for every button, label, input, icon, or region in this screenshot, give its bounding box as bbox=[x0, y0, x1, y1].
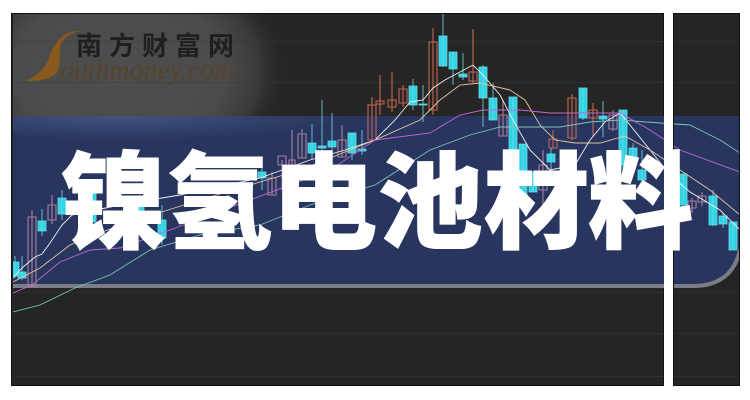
line: MA5 white bbox=[13, 65, 740, 278]
blue title band bbox=[13, 116, 740, 286]
logo url: outhmoney.com bbox=[60, 55, 234, 86]
title: 料 bbox=[588, 146, 693, 263]
title: 氢 bbox=[167, 146, 272, 263]
logo: southmoney bbox=[25, 31, 241, 86]
candles: hollow rising, pink bbox=[28, 100, 706, 287]
line: MA20 purple bbox=[13, 110, 740, 293]
title: 镍 bbox=[61, 146, 166, 263]
title bbox=[61, 146, 693, 263]
candlestick chart bbox=[11, 14, 737, 287]
moving average lines bbox=[13, 65, 740, 312]
candles: solid falling, cyan bbox=[11, 14, 737, 280]
logo glow bbox=[13, 14, 313, 117]
title: 材 bbox=[484, 146, 589, 263]
candles: hollow rising, red bbox=[368, 28, 597, 148]
title: 电 bbox=[272, 146, 377, 263]
line: MA10 cream bbox=[13, 83, 740, 282]
line: MA60 teal bbox=[13, 120, 740, 312]
logo chinese name: 南方财富网 bbox=[76, 31, 241, 61]
logo S swoosh bbox=[25, 31, 80, 81]
title: 池 bbox=[378, 146, 483, 263]
panel: dark chart background right bbox=[674, 14, 740, 386]
